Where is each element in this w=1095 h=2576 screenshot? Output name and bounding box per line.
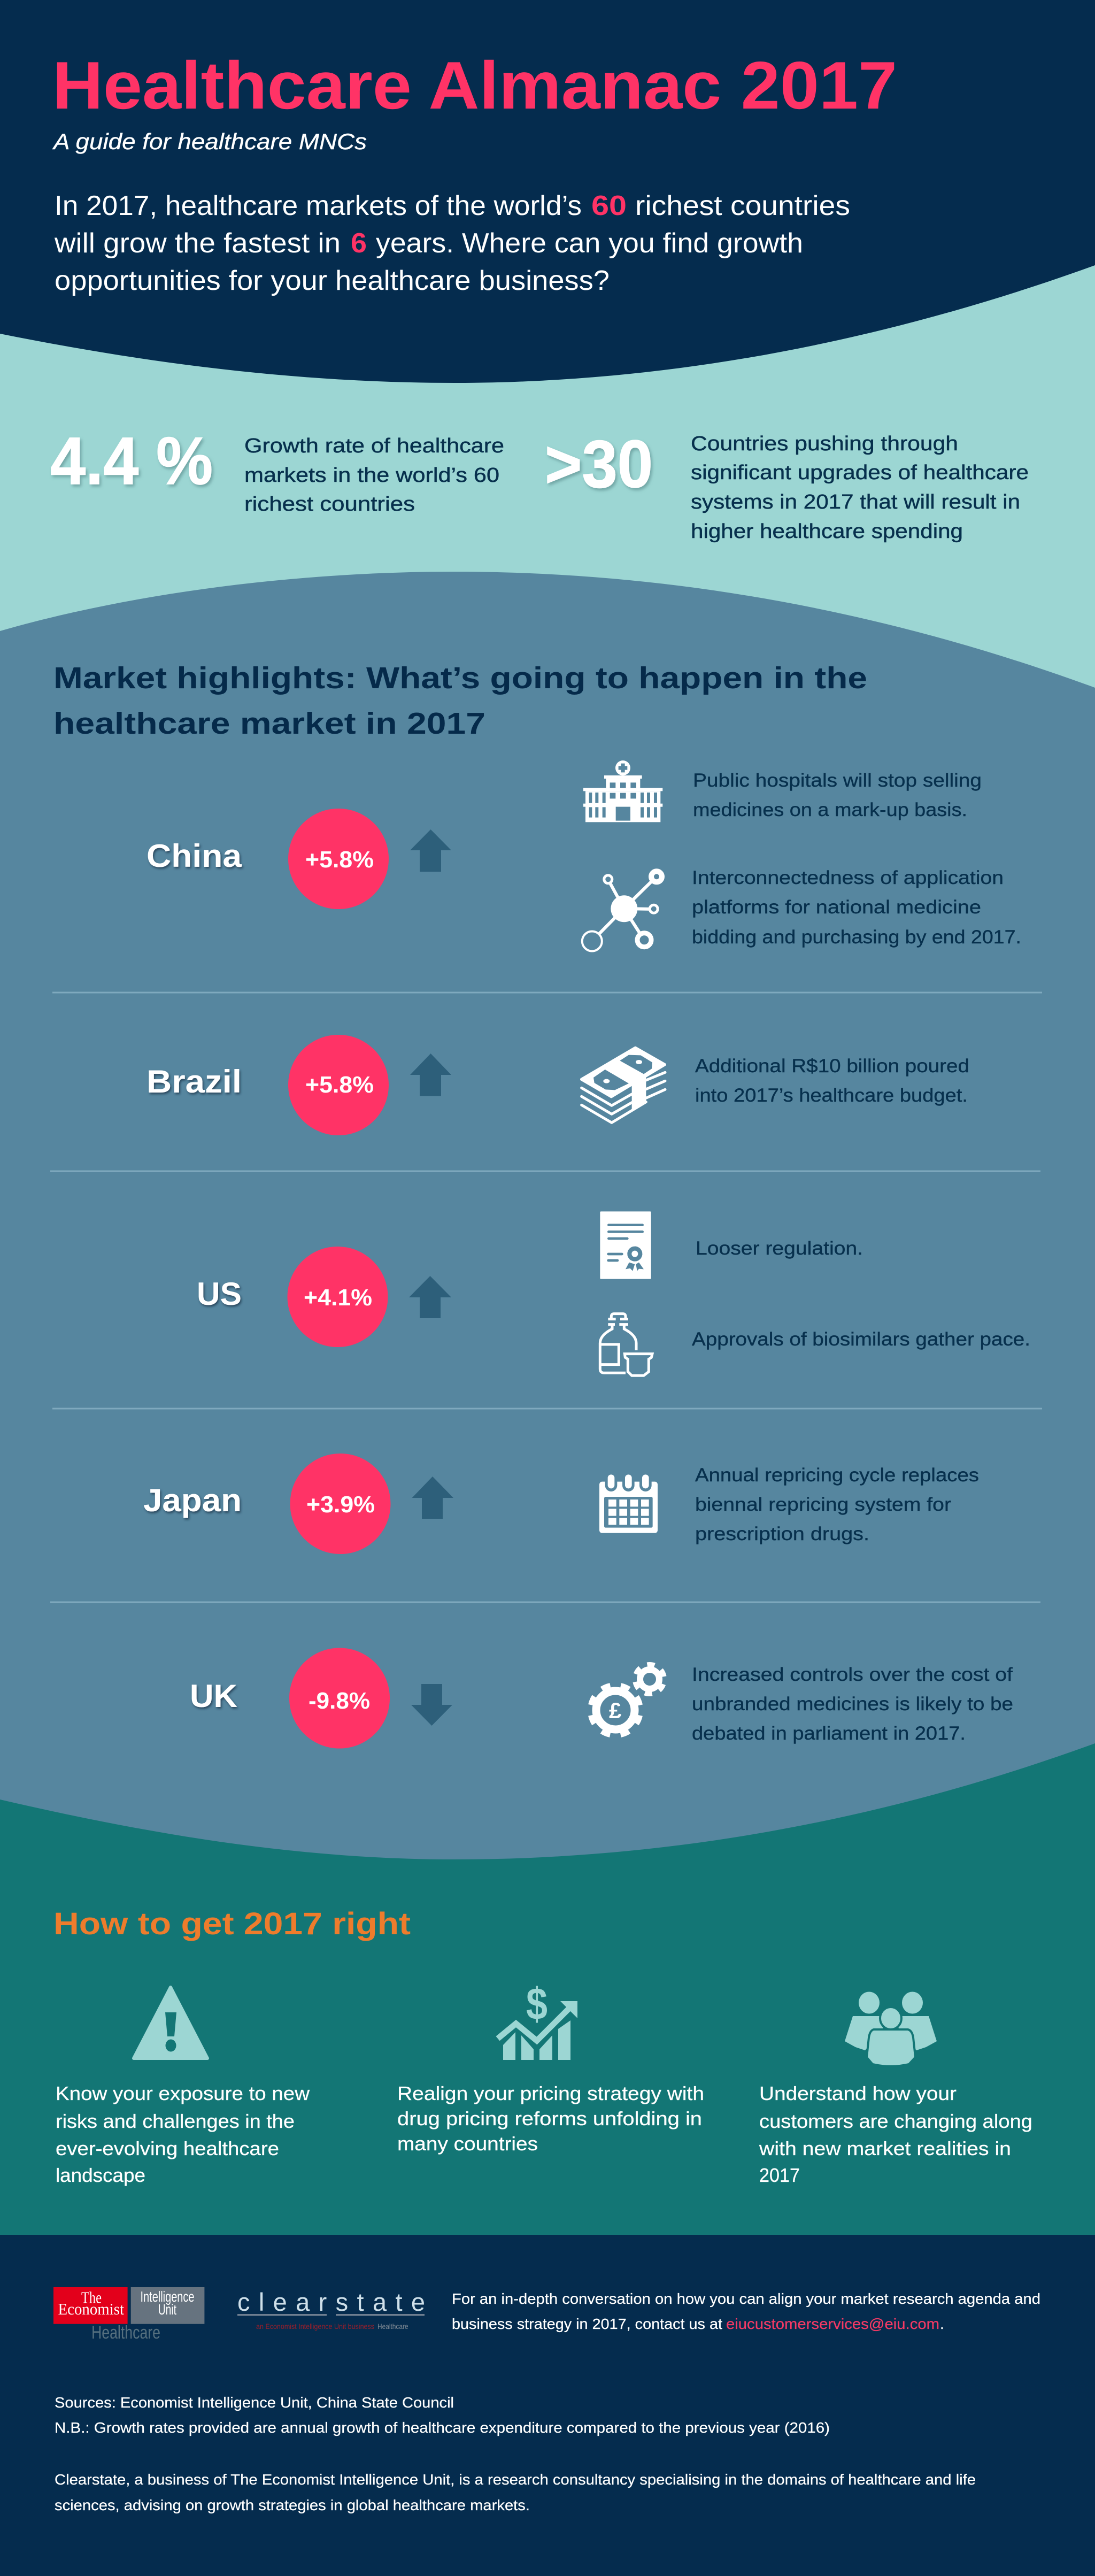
- tip: customers: 2017: [759, 2164, 800, 2186]
- intro text: [54, 190, 850, 296]
- arrow up: [410, 1054, 451, 1096]
- heading: market highlights: [53, 661, 867, 741]
- tip: pricing: [397, 2082, 704, 2155]
- text: repricing: [695, 1465, 979, 1544]
- icon: money stack: [582, 1048, 665, 1122]
- arrow down: [411, 1684, 452, 1726]
- panel: how to get 2017 right: [53, 1906, 1032, 2186]
- country label: US: US: [197, 1276, 242, 1312]
- text: biosimilars: Approvals of biosimilars gather pace.: [692, 1329, 1030, 1350]
- text: contact: eiucustomerservices@eiu.com: [726, 2316, 939, 2332]
- text: cost controls: unbranded medicines is likely to be: [692, 1694, 1013, 1714]
- tip: customers: Understand how your: [759, 2082, 957, 2104]
- icon: bottle and cup: [600, 1314, 652, 1375]
- icon: customers group: [845, 1991, 937, 2066]
- icon: network: [582, 871, 662, 951]
- text: budget: Additional R$10 billion poured: [695, 1056, 969, 1076]
- stat text: growth rate: richest countries: [244, 493, 415, 516]
- stat: >30: >30: [545, 427, 653, 502]
- growth badge: Japan: +3.9%: [306, 1491, 375, 1518]
- stat text: countries: systems in 2017 that will result in: [691, 491, 1020, 513]
- background: teal section: [0, 1711, 1095, 2241]
- tip: customers: customers are changing along: [759, 2110, 1032, 2132]
- intro text: 6: [351, 228, 367, 259]
- text: cost controls: Increased controls over the cost of: [692, 1664, 1013, 1685]
- tip: exposure: Know your exposure to new: [56, 2082, 310, 2104]
- growth badge: Japan: [290, 1454, 390, 1554]
- icon: pricing chart: $: [526, 1979, 548, 2029]
- subtitle: A guide for healthcare MNCs: [52, 129, 367, 154]
- text: repricing: Annual repricing cycle replaces: [695, 1465, 979, 1486]
- icon: hospital: [583, 760, 662, 822]
- text: sources: Sources: Economist Intelligence Unit, China State Council: [55, 2394, 454, 2411]
- heading: how to get 2017 right: How to get 2017 right: [53, 1906, 411, 1941]
- intro text: years. Where can you find growth: [376, 228, 803, 259]
- growth badge: UK: -9.8%: [309, 1688, 370, 1714]
- growth badge: China: +5.8%: [305, 847, 374, 873]
- row: Brazil: [146, 1035, 969, 1135]
- logo: The Economist Intelligence Unit Healthcare: Healthcare: [91, 2323, 160, 2343]
- stat text: growth rate: [244, 435, 504, 516]
- text: about Clearstate: Clearstate, a business of The Economist Intelligence Unit, is a research consultancy specialising in the domains of healthcare and life: [55, 2471, 976, 2488]
- icon: gears with pound: £: [609, 1698, 621, 1723]
- tip: pricing: many countries: [397, 2133, 538, 2155]
- stat text: countries: higher healthcare spending: [691, 520, 963, 543]
- heading: market highlights: healthcare market in 2017: [53, 706, 485, 741]
- country label: Japan: Japan: [143, 1482, 242, 1518]
- country label: China: China: [146, 838, 242, 874]
- text: hospitals: medicines on a mark-up basis.: [693, 799, 967, 820]
- logo: The Economist Intelligence Unit Healthcare: Unit: [158, 2301, 176, 2318]
- text: sources: [55, 2394, 830, 2436]
- intro text: opportunities for your healthcare business?: [55, 265, 610, 296]
- tip: customers: with new market realities in: [759, 2137, 1011, 2159]
- text: interconnectedness: [692, 867, 1021, 948]
- row: China: [146, 760, 1021, 951]
- logo: The Economist Intelligence Unit Healthcare: Economist: [58, 2300, 124, 2318]
- tip: pricing: drug pricing reforms unfolding in: [397, 2108, 702, 2129]
- arrow up: [409, 1276, 451, 1318]
- row: Japan: [143, 1454, 979, 1554]
- growth badge: China: [288, 809, 389, 909]
- text: contact: business strategy in 2017, contact us at: [452, 2316, 722, 2332]
- panel: header: [52, 48, 897, 296]
- growth badge: Brazil: +5.8%: [305, 1072, 374, 1098]
- background: navy footer: [0, 2235, 1095, 2576]
- tip: customers: [759, 2082, 1032, 2186]
- growth badge: Brazil: [288, 1035, 389, 1135]
- logo: clearstate: an Economist Intelligence Unit business: [256, 2322, 374, 2331]
- text: about Clearstate: sciences, advising on growth strategies in global healthcare markets.: [55, 2497, 530, 2513]
- tip: exposure: [56, 2082, 310, 2186]
- tip: pricing: Realign your pricing strategy with: [397, 2082, 704, 2104]
- text: repricing: biennal repricing system for: [695, 1494, 951, 1515]
- arrow up: [412, 1477, 453, 1519]
- country label: UK: UK: [190, 1678, 237, 1714]
- text: cost controls: debated in parliament in 2017.: [692, 1723, 966, 1744]
- tip: exposure: landscape: [56, 2164, 145, 2186]
- title: Healthcare Almanac 2017: [52, 48, 897, 123]
- text: repricing: prescription drugs.: [695, 1524, 869, 1544]
- icon: gears with pound: [586, 1660, 668, 1740]
- panel: key statistics: [50, 424, 1029, 543]
- stat text: countries: [691, 433, 1029, 543]
- row: UK: [190, 1648, 1013, 1749]
- intro text: 60: [591, 190, 627, 221]
- text: hospitals: Public hospitals will stop selling: [693, 770, 982, 791]
- stat text: growth rate: markets in the world’s 60: [244, 464, 499, 487]
- tip: exposure: risks and challenges in the: [56, 2110, 295, 2132]
- logo: clearstate: [237, 2288, 425, 2331]
- intro text: In 2017, healthcare markets of the world’s: [55, 190, 582, 221]
- country label: Brazil: Brazil: [146, 1064, 242, 1099]
- text: contact: .: [940, 2316, 944, 2332]
- icon: warning triangle: [134, 1987, 207, 2058]
- growth badge: UK: [289, 1648, 390, 1749]
- icon: pricing chart: [498, 1979, 577, 2060]
- logo: The Economist Intelligence Unit Healthcare: The: [81, 2288, 102, 2307]
- stat: 4.4 %: 4.4 %: [50, 424, 213, 498]
- icon: calendar: [599, 1473, 658, 1533]
- text: interconnectedness: Interconnectedness of application: [692, 867, 1004, 888]
- intro text: richest countries: [635, 190, 850, 221]
- text: budget: into 2017’s healthcare budget.: [695, 1085, 968, 1106]
- panel: market highlights: [53, 661, 1030, 1749]
- logo: clearstate: clearstate: [237, 2288, 425, 2316]
- growth badge: US: [288, 1247, 388, 1347]
- stat text: countries: Countries pushing through: [691, 433, 958, 455]
- text: contact: For an in-depth conversation on how you can align your market research agenda and: [452, 2290, 1040, 2307]
- text: contact: [452, 2290, 1040, 2332]
- panel: footer: [53, 2287, 1040, 2513]
- background: navy header: [0, 0, 1095, 383]
- logo: The Economist Intelligence Unit Healthcare: Intelligence: [140, 2288, 195, 2305]
- arrow up: [410, 829, 451, 872]
- heading: market highlights: Market highlights: What’s going to happen in the: [53, 661, 867, 695]
- logo: The Economist Intelligence Unit Healthcare: [53, 2287, 204, 2343]
- logo: clearstate: Healthcare: [377, 2322, 408, 2331]
- text: interconnectedness: bidding and purchasing by end 2017.: [692, 927, 1021, 948]
- text: interconnectedness: platforms for national medicine: [692, 897, 981, 918]
- text: sources: N.B.: Growth rates provided are annual growth of healthcare expenditure compared to the previous year (2016): [55, 2419, 830, 2436]
- growth badge: US: +4.1%: [304, 1285, 372, 1311]
- tip: exposure: ever-evolving healthcare: [56, 2137, 279, 2159]
- text: looser regulation: Looser regulation.: [696, 1238, 863, 1259]
- text: about Clearstate: [55, 2471, 976, 2513]
- intro text: will grow the fastest in: [54, 228, 341, 259]
- text: budget: [695, 1056, 969, 1106]
- text: cost controls: [692, 1664, 1013, 1744]
- row: US: [197, 1211, 1030, 1375]
- background: blue market section: [0, 572, 1095, 1859]
- stat text: countries: significant upgrades of healthcare: [691, 462, 1029, 484]
- background: light teal section: [0, 257, 1095, 701]
- icon: certificate: [600, 1211, 651, 1279]
- text: hospitals: [693, 770, 982, 820]
- stat text: growth rate: Growth rate of healthcare: [244, 435, 504, 457]
